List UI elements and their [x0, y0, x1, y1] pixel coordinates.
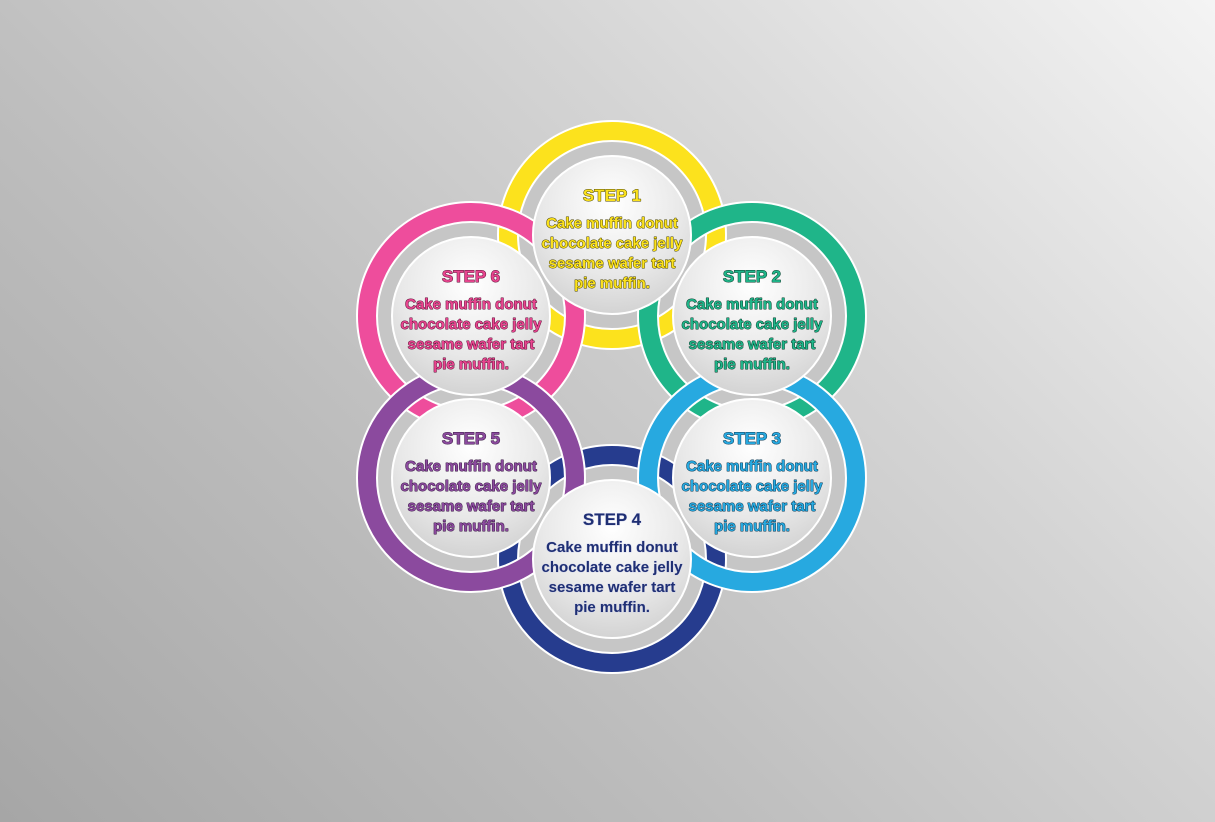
- text: step 5: pie muffin.: [433, 518, 509, 535]
- text: step 6: chocolate cake jelly: [401, 316, 542, 333]
- text: step 5: chocolate cake jelly: [401, 478, 542, 495]
- text: step 2: Cake muffin donut: [686, 296, 818, 313]
- panel: step 6: [392, 237, 550, 395]
- ring: step 3: [648, 374, 856, 582]
- text: step 3: [682, 429, 823, 535]
- text: step 5: [401, 429, 542, 535]
- text: step 3: sesame wafer tart: [689, 498, 815, 515]
- text: step 4: STEP 4: [583, 510, 642, 529]
- text: step 6: pie muffin.: [433, 356, 509, 373]
- panel: step 3: [673, 399, 831, 557]
- text: step 1: pie muffin.: [574, 275, 650, 292]
- text: step 1: chocolate cake jelly: [542, 235, 683, 252]
- text: step 1: STEP 1: [583, 186, 641, 205]
- text: step 6: sesame wafer tart: [408, 336, 534, 353]
- text: step 6: STEP 6: [442, 267, 500, 286]
- text: step 5: STEP 5: [442, 429, 500, 448]
- ring: step 6: [367, 212, 575, 420]
- diagram: six interlocking step rings: [367, 131, 856, 663]
- text: step 4: chocolate cake jelly: [542, 559, 683, 576]
- ring: step 1: [508, 131, 716, 339]
- text: step 3: Cake muffin donut: [686, 458, 818, 475]
- text: step 3: pie muffin.: [714, 518, 790, 535]
- text: step 2: sesame wafer tart: [689, 336, 815, 353]
- text: step 1: Cake muffin donut: [546, 215, 678, 232]
- text: step 2: chocolate cake jelly: [682, 316, 823, 333]
- ring: step 2: [648, 212, 856, 420]
- text: step 4: Cake muffin donut: [546, 539, 678, 556]
- text: step 4: [542, 510, 683, 616]
- text: step 3: STEP 3: [723, 429, 781, 448]
- text: step 6: [401, 267, 542, 373]
- ring: step 5: [367, 374, 575, 582]
- text: step 3: chocolate cake jelly: [682, 478, 823, 495]
- text: step 5: Cake muffin donut: [405, 458, 537, 475]
- text: step 2: pie muffin.: [714, 356, 790, 373]
- panel: step 2: [673, 237, 831, 395]
- text: step 2: STEP 2: [723, 267, 781, 286]
- panel: step 5: [392, 399, 550, 557]
- text: step 4: sesame wafer tart: [549, 579, 675, 596]
- text: step 6: Cake muffin donut: [405, 296, 537, 313]
- panel: step 4: [533, 480, 691, 638]
- text: step 4: pie muffin.: [574, 599, 650, 616]
- text: step 1: sesame wafer tart: [549, 255, 675, 272]
- panel: step 1: [533, 156, 691, 314]
- text: step 2: [682, 267, 823, 373]
- text: step 5: sesame wafer tart: [408, 498, 534, 515]
- ring: step 4: [508, 455, 716, 663]
- text: step 1: [542, 186, 683, 292]
